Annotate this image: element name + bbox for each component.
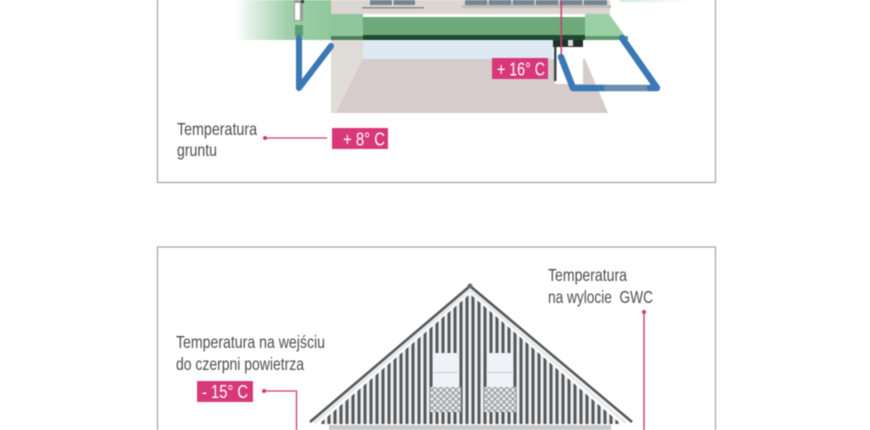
- ground band: green soil: [235, 0, 690, 40]
- label: ground temperature: Temperatura: [177, 119, 257, 139]
- window: right: [484, 353, 516, 412]
- value: +8 C: [332, 128, 388, 150]
- value: -15 C: - 15° C: [202, 382, 248, 402]
- pipe: left ground duct: [299, 38, 331, 88]
- house: basement: [331, 39, 608, 113]
- callout: intake leader: [262, 389, 296, 430]
- label: outlet temperature: Temperatura: [548, 265, 627, 285]
- house: wall and windows: [331, 0, 611, 14]
- pipe: right ground duct: [561, 38, 657, 88]
- callout: indoor line: [560, 0, 562, 55]
- label: gruntu: gruntu: [177, 140, 217, 160]
- window: left: [430, 353, 461, 412]
- value: +16 C: + 16° C: [497, 60, 545, 80]
- callout: outlet leader: [642, 310, 646, 430]
- label: intake temperature: Temperatura na wejściu: [176, 332, 325, 352]
- panel: winter temperature: [158, 247, 716, 430]
- callout: ground leader: [263, 136, 327, 140]
- house: green foundation band: [331, 14, 628, 40]
- label: intake line two: do czerpni powietrza: [176, 354, 304, 374]
- value: +8 C: + 8° C: [343, 130, 385, 150]
- house: gable: [310, 284, 632, 430]
- ventilation intake: [294, 0, 304, 36]
- label: outlet line two: na wylocie GWC: [548, 287, 653, 307]
- panel: ground temperature: [158, 0, 716, 182]
